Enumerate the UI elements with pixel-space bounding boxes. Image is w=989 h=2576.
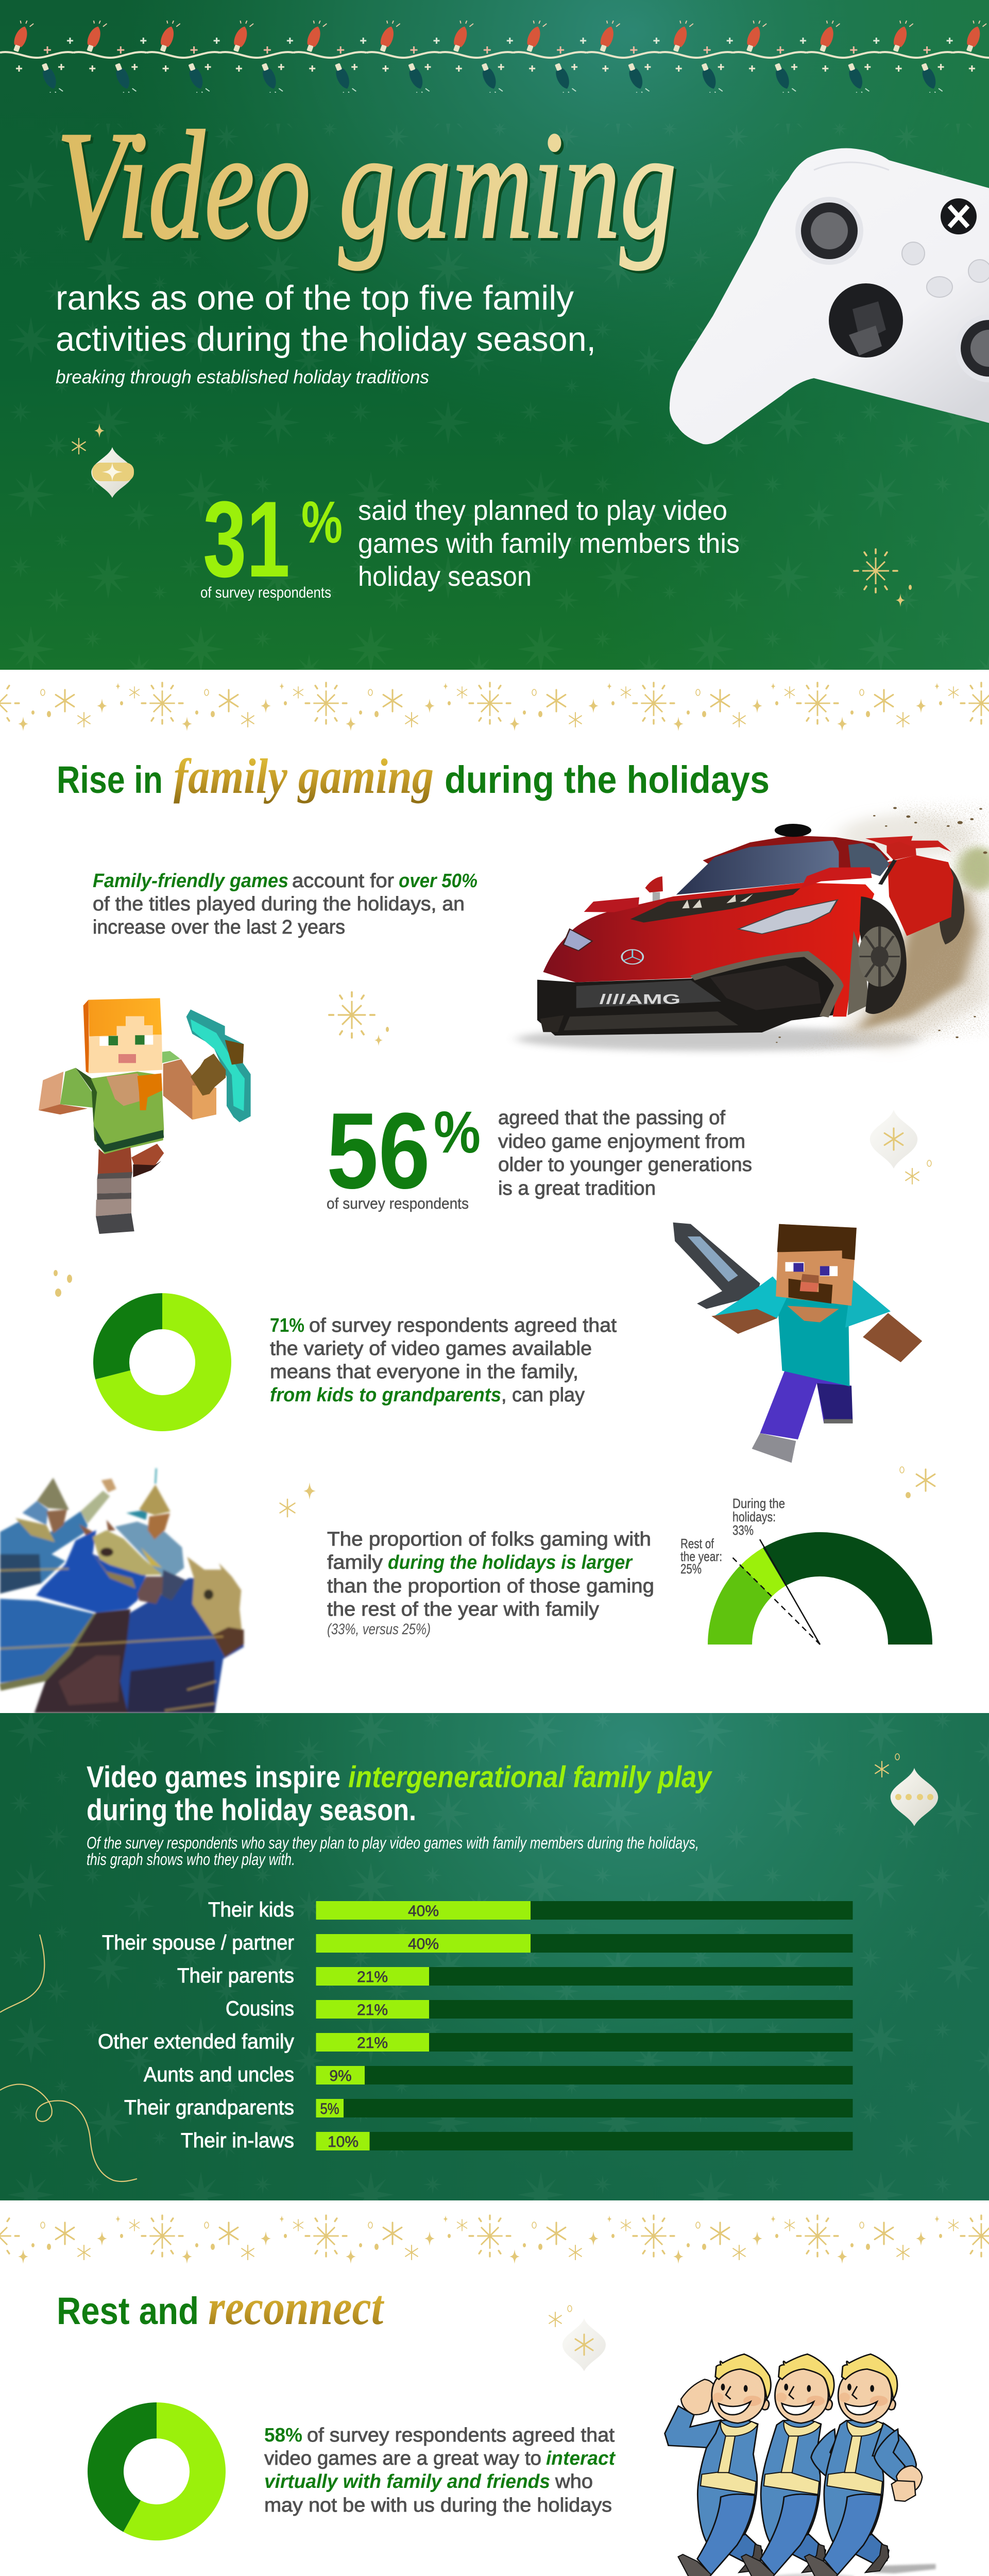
text: graph explanation: this graph shows who they play with. [87,1850,295,1869]
text: 31 percent description: games with family members this [358,528,740,559]
heading: rest and reconnect [57,2280,385,2335]
label: during the holidays [732,1496,785,1538]
bar values: 9% [329,2067,352,2084]
hero subtitle: ranks as one of the top five family [56,279,574,317]
text: holidays proportion: family [327,1552,383,1573]
bar labels: Their parents [177,1964,294,1987]
vault boy right [805,2354,922,2576]
illustration: red race car: ////AMG [600,991,680,1007]
bar labels: Their kids [208,1899,294,1921]
text: 31 percent description: holiday season [358,561,532,592]
icon: ornament with gold dots [875,1754,938,1826]
chart: donut 58 percent [88,2402,226,2540]
text: 58 percent description: interact [546,2448,616,2469]
hero subtitle [56,279,596,387]
text: 71 percent description: from kids to grandparents [270,1384,501,1406]
stat: 31 percent: % [301,489,343,555]
bar labels: Aunts and uncles [144,2063,294,2086]
hero subtitle: activities during the holiday season, [56,320,596,359]
icon: pale ornament [870,1110,931,1184]
text: 71 percent description: means that everyone in the family, [270,1361,578,1383]
label: rest of the year: Rest of [680,1536,714,1551]
heading: rest and reconnect: reconnect [208,2280,385,2335]
text: 31 percent description [358,495,740,592]
text: family-friendly games: Family-friendly games [93,870,288,892]
heading: intergenerational family play: intergenerational family play [348,1760,712,1794]
text: 58 percent description: 58% [264,2425,302,2446]
panel: intergenerational play [0,1713,989,2200]
chart: donut 71 percent [93,1293,231,1431]
bar values: 10% [328,2133,359,2150]
heading: rise in family gaming [57,749,770,804]
text: holidays proportion: the rest of the year with family [327,1599,599,1620]
text: 58 percent description: who [555,2471,593,2493]
bar labels [98,1899,294,2152]
text: 58 percent description: may not be with us during the holidays [264,2495,612,2516]
heading: intergenerational family play: Video games inspire [87,1760,340,1794]
bar values: 5% [320,2100,339,2117]
heading: rest and reconnect: Rest and [57,2290,199,2332]
title: Video gaming [59,102,679,274]
icon: gold dots [54,1270,72,1297]
text: 71 percent description: the variety of video games available [270,1338,592,1360]
heading: intergenerational family play: during the holiday season. [87,1793,416,1827]
text: holidays proportion: than the proportion of those gaming [327,1575,654,1597]
text: 58 percent description [264,2425,616,2516]
bar labels: Cousins [226,1997,294,2020]
heading: intergenerational family play [87,1760,712,1827]
text: 58 percent description: video games are a great way to [264,2448,541,2469]
hero subtitle: breaking through established holiday traditions [56,366,429,387]
illustration: cavalry riders [0,1468,244,1713]
bar values [320,1903,439,2150]
heading: rise in family gaming: during the holidays [445,758,770,801]
bar values: 21% [357,2035,388,2052]
heading: rise in family gaming: family gaming [174,749,434,804]
text: 58 percent description: virtually with family and friends [264,2471,550,2493]
text: graph explanation [87,1834,699,1869]
illustration: three vault boys [665,2354,936,2576]
icon: gold sparkles [280,1482,316,1517]
holiday string lights [0,21,989,93]
heading: rise in family gaming: Rise in [57,758,163,801]
icon: gold firework [854,549,912,607]
text: family-friendly games [93,870,478,938]
text: 56 percent description [498,1107,752,1199]
icon: gold firework [329,992,389,1046]
text: 71 percent description [270,1315,617,1406]
text: holidays proportion: (33%, versus 25%) [327,1621,431,1638]
text: holidays proportion: during the holidays is larger [388,1552,633,1573]
vault boy middle [741,2354,859,2576]
label: rest of the year: the year: [680,1549,722,1564]
bar values: 40% [408,1936,439,1953]
text: family-friendly games: over 50% [399,870,478,892]
text: 56 percent description: is a great tradition [498,1178,656,1199]
label: rest of the year [680,1536,722,1577]
text: 56 percent description: agreed that the passing of [498,1107,725,1129]
icon: ornament [72,423,134,498]
label: during the holidays: holidays: [732,1509,776,1524]
text: 31 percent description: said they planned to play video [358,495,727,526]
stat: 31 percent: of survey respondents [200,584,331,601]
vault boy left: saluting [665,2354,771,2448]
stat: 56 percent: 56 [327,1090,430,1211]
label: during the holidays: During the [732,1496,785,1511]
text: 71 percent description: of survey respondents agreed that [309,1315,617,1336]
gold sparkle band [0,2213,989,2264]
gold sparkle band [0,680,989,732]
bar values: 21% [357,1969,388,1986]
text: 71 percent description: , can play [501,1384,585,1406]
bar labels: Other extended family [98,2030,294,2053]
label: rest of the year: 25% [680,1561,702,1577]
bar labels: Their grandparents [124,2096,294,2119]
icon: gold decorations [900,1467,935,1498]
label: during the holidays: 33% [732,1522,754,1538]
bar values: 40% [408,1903,439,1920]
text: 71 percent description: 71% [270,1315,304,1336]
text: holidays proportion [327,1529,654,1638]
illustration: red race car [517,804,989,1051]
icon: pale ornament [549,2306,606,2371]
decorative gold ribbon [0,1935,137,2181]
text: graph explanation: Of the survey respondents who say they plan to play video games with family members during the holidays, [87,1834,699,1852]
text: 56 percent description: older to younger generations [498,1154,752,1176]
text: holidays proportion: The proportion of folks gaming with [327,1529,651,1550]
title: Video gaming [57,99,676,271]
text: family-friendly games: account for [292,870,394,892]
text: 58 percent description: of survey respondents agreed that [307,2425,615,2446]
bar values: 21% [357,2002,388,2019]
icon: xbox controller [670,148,989,444]
text: family-friendly games: increase over the last 2 years [93,917,345,938]
bar labels: Their spouse / partner [102,1931,294,1954]
text: 56 percent description: video game enjoyment from [498,1131,745,1153]
illustration: Alex minecraft character [39,998,251,1234]
panel: hero [0,0,989,670]
illustration: Steve minecraft character [673,1223,922,1463]
chart: gauge [680,1496,932,1645]
bar labels: Their in-laws [181,2129,294,2152]
text: family-friendly games: of the titles played during the holidays, an [93,893,465,915]
stat: 56 percent: of survey respondents [327,1195,469,1212]
stat: 56 percent: % [434,1099,481,1165]
chart: who they play with [98,1899,853,2152]
stat: 31 percent: 31 [203,479,290,600]
